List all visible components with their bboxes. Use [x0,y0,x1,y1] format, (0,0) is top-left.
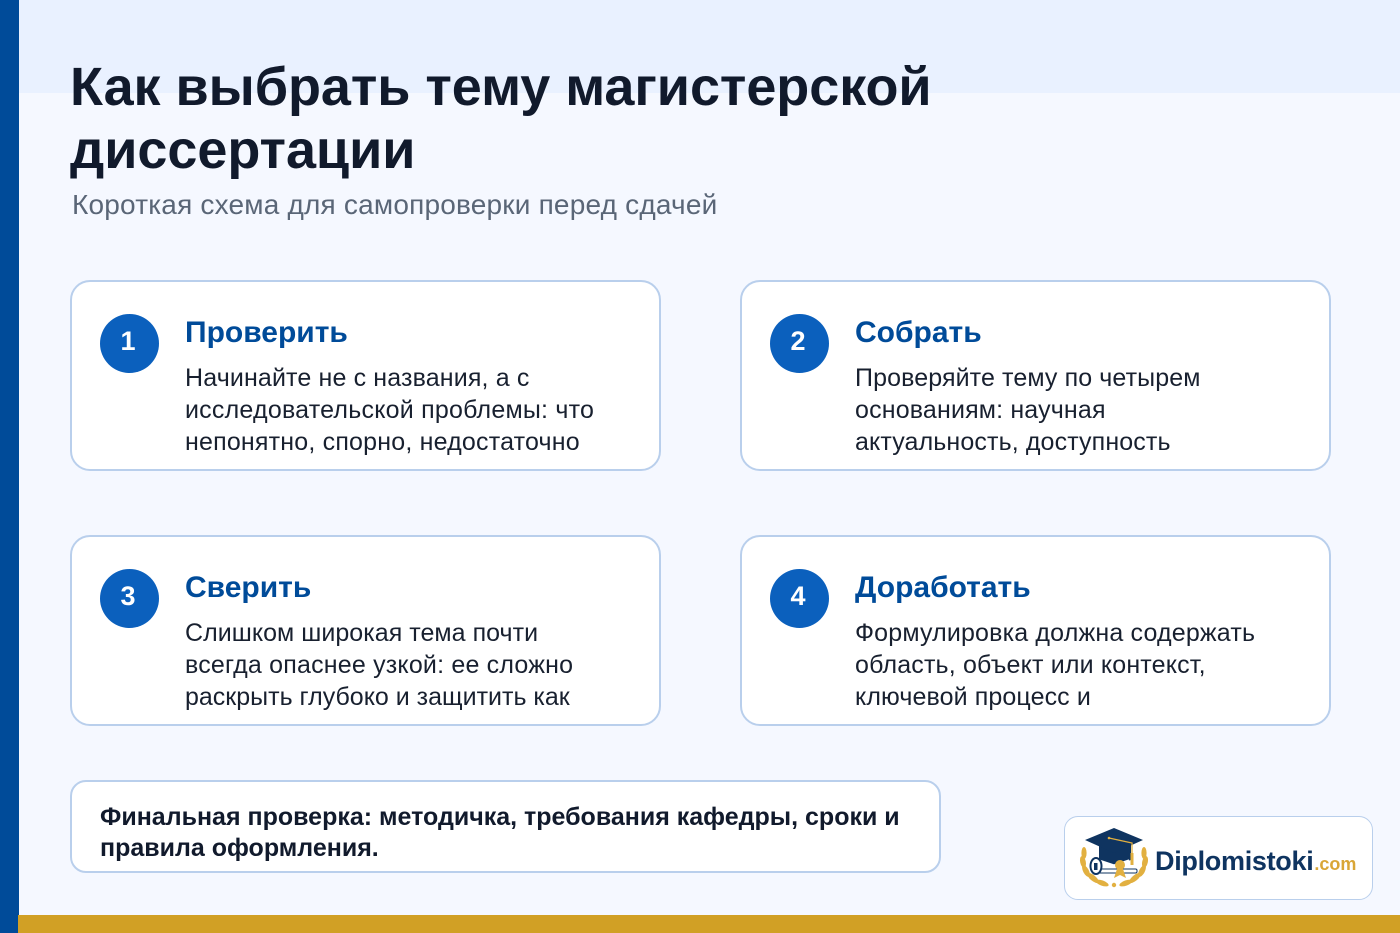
step 1 text: Начинайте не с названия, а с [185,364,529,392]
icon: graduation cap with laurel [1080,828,1148,888]
panel: step 2 [740,280,1331,471]
final check text: правила оформления. [100,834,379,862]
step 2 text [855,364,1201,456]
header band [0,0,1400,93]
step 3 number: 3 [120,581,136,611]
step 3 number [100,569,159,628]
step 4 heading: Доработать [855,571,1031,604]
step 2 text: актуальность, доступность [855,428,1171,456]
panel: step 4 [740,535,1331,726]
final check text [100,803,900,862]
step 1 text [185,364,594,456]
title [70,56,932,180]
step 2 text: Проверяйте тему по четырем [855,364,1201,392]
panel: logo [1064,816,1373,900]
step 4 text: Формулировка должна содержать [855,618,1255,646]
panel: step 1 [70,280,661,471]
step 1 heading: Проверить [185,316,348,349]
step 1 text: исследовательской проблемы: что [185,396,594,424]
step 3 text: раскрыть глубоко и защитить как [185,682,570,710]
step 1 number: 1 [120,326,136,356]
step 4 number [770,569,829,628]
subtitle: Короткая схема для самопроверки перед сдачей [72,189,717,220]
title: Как выбрать тему магистерской [70,56,932,116]
step 4 text [855,618,1255,710]
step 2 number [770,314,829,373]
title: диссертации [70,120,415,180]
step 2 text: основаниям: научная [855,396,1106,424]
panel: final check callout [70,780,941,873]
step 3 heading: Сверить [185,571,311,604]
step 1 number [100,314,159,373]
panel: step 3 [70,535,661,726]
logo wordmark: Diplomistoki.com [1155,846,1356,876]
step 4 number: 4 [790,581,806,611]
bottom gold bar [18,915,1400,933]
step 2 number: 2 [790,326,806,356]
step 4 text: область, объект или контекст, [855,650,1206,678]
step 3 text: всегда опаснее узкой: ее сложно [185,650,573,678]
step 4 text: ключевой процесс и [855,682,1091,710]
step 3 text [185,618,573,710]
step 2 heading: Собрать [855,316,982,349]
final check text: Финальная проверка: методичка, требования кафедры, сроки и [100,803,900,831]
left accent bar [0,0,19,933]
step 1 text: непонятно, спорно, недостаточно [185,428,580,456]
step 3 text: Слишком широкая тема почти [185,618,538,646]
